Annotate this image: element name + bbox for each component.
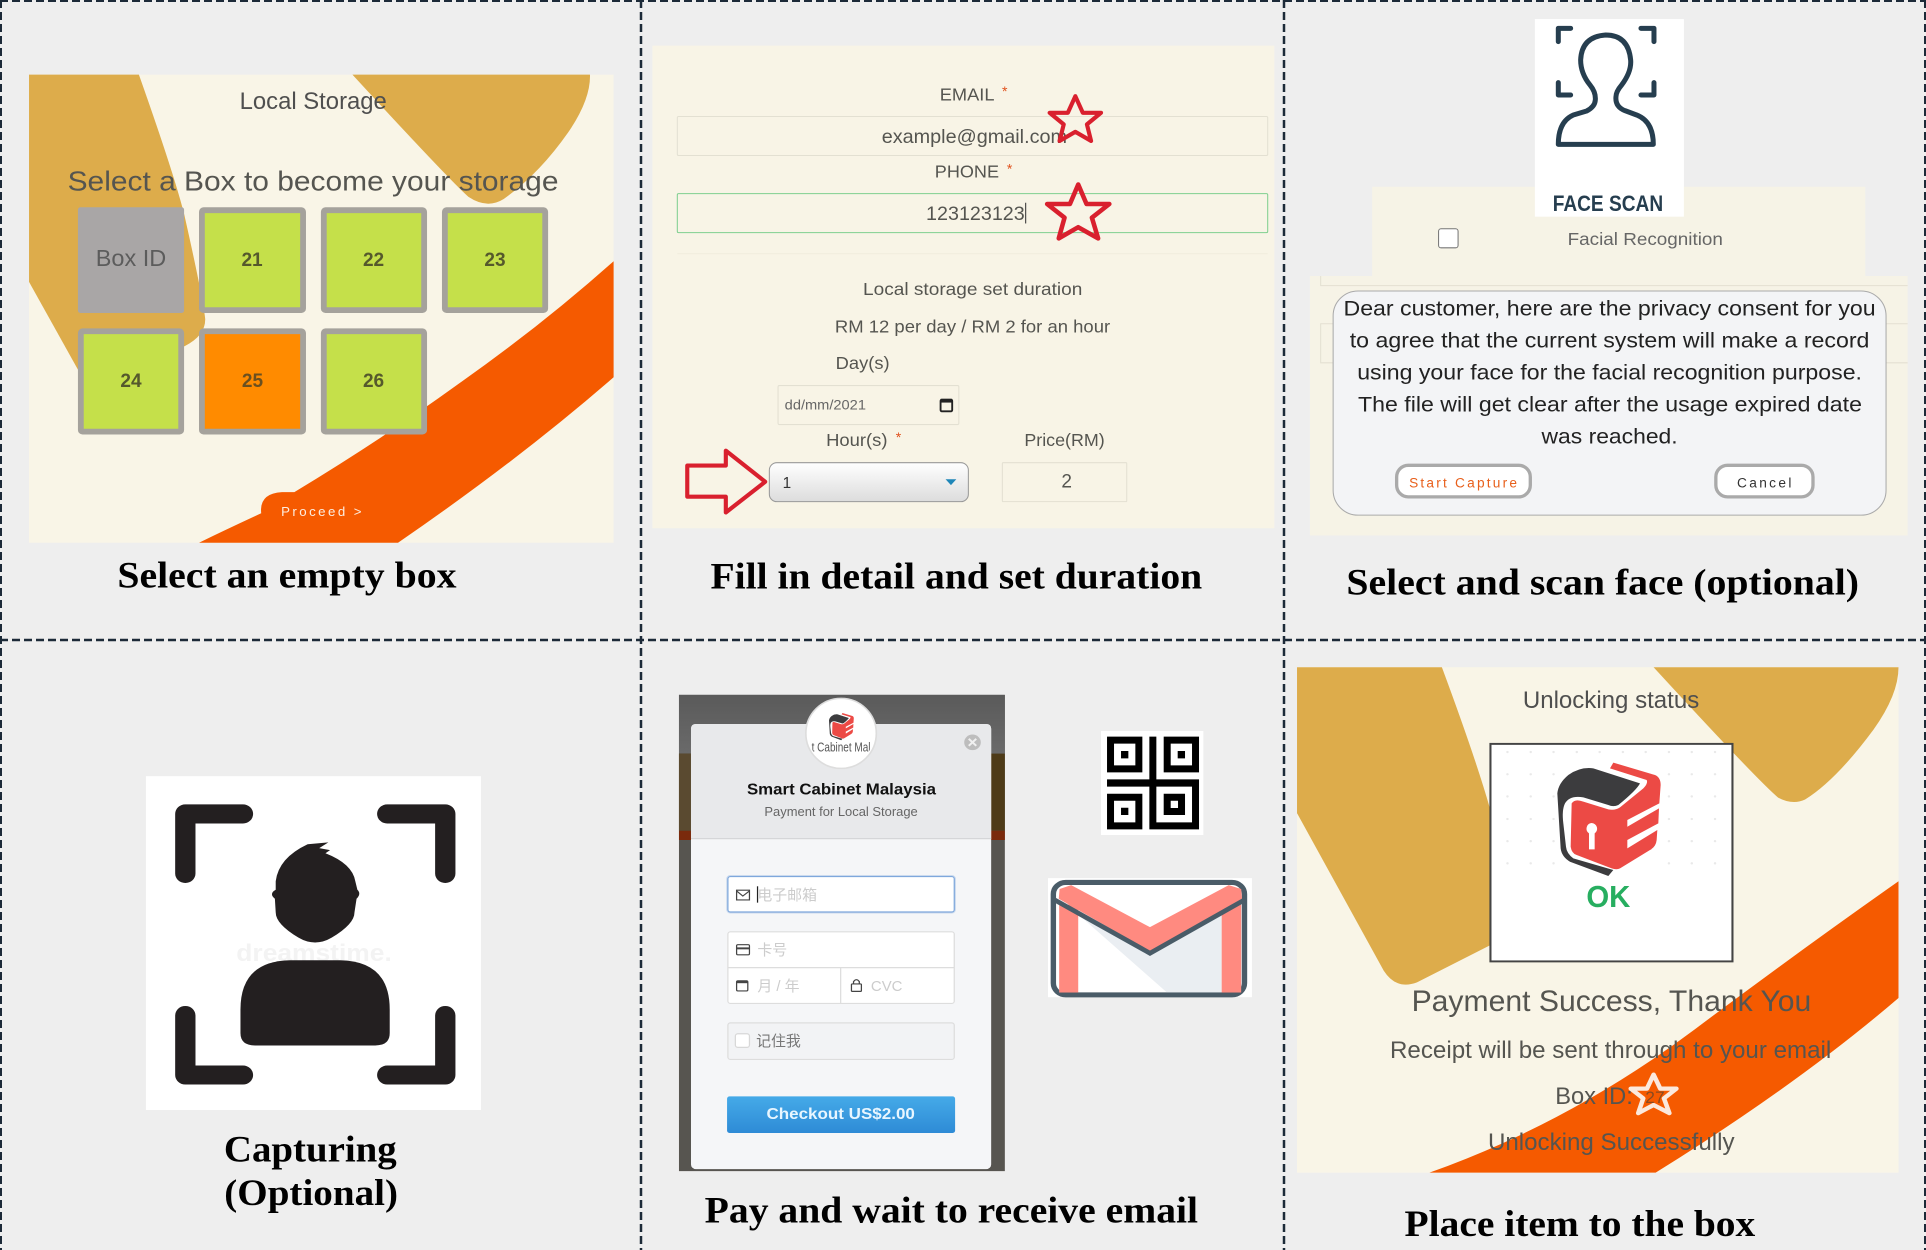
box 23: 23 <box>484 250 506 271</box>
small logo <box>829 713 854 740</box>
icon: gmail envelope <box>1048 878 1252 997</box>
box 21: 21 <box>241 250 263 271</box>
box id text: Box ID: <box>1555 1084 1633 1110</box>
screenshot background <box>29 75 614 543</box>
card fields <box>728 932 954 1003</box>
heading: Place item: Place item to the box <box>1405 1204 1755 1245</box>
orange swoosh <box>199 261 614 543</box>
instruction text: Select a Box to become your storage <box>68 165 558 197</box>
box 24 <box>81 331 181 432</box>
head <box>272 842 359 943</box>
clipped logo text: t Cabinet Mal <box>812 740 871 755</box>
phone label: * <box>1007 161 1013 177</box>
box 21 <box>202 210 303 310</box>
card fields: 卡号 <box>757 943 787 959</box>
payment modal <box>691 698 991 1169</box>
consent text: to agree that the current system will make a record <box>1350 327 1869 352</box>
form background <box>652 46 1274 528</box>
icon: QR code <box>1101 731 1203 835</box>
checkbox <box>1439 229 1458 248</box>
gold shape left <box>1297 667 1490 985</box>
box 23 <box>445 210 545 310</box>
card fields: CVC <box>871 978 902 995</box>
date input <box>778 386 959 425</box>
box 22 <box>324 210 424 310</box>
start capture button: Start Capture <box>1409 475 1517 490</box>
box 22: 22 <box>363 250 384 271</box>
gold shape left <box>29 75 205 371</box>
remember me: 记住我 <box>756 1033 801 1050</box>
title: Local Storage: Local Storage <box>240 89 387 115</box>
logo circle <box>806 698 876 768</box>
days label: Day(s) <box>836 353 890 373</box>
capture icon <box>146 776 481 1110</box>
cancel button <box>1716 465 1813 497</box>
logo card <box>1490 744 1732 961</box>
unlocking status title: Unlocking status <box>1523 688 1699 714</box>
checkout button <box>727 1096 955 1133</box>
white star over box id: 27 <box>1645 1089 1665 1107</box>
hours select: 1 <box>783 475 791 492</box>
price label: Price(RM) <box>1024 430 1105 450</box>
consent text: using your face for the facial recognition purpose. <box>1357 359 1862 384</box>
corner brackets <box>185 814 445 1075</box>
consent text: The file will get clear after the usage expired date <box>1358 391 1862 416</box>
panel: pay and wait for email <box>679 695 1252 1231</box>
box 25: 25 <box>242 371 263 392</box>
consent text <box>1344 295 1876 448</box>
duration title: Local storage set duration <box>863 279 1082 299</box>
heading: Fill in detail: Fill in detail and set duration <box>710 556 1202 597</box>
merchant name: Smart Cabinet Malaysia <box>747 781 937 798</box>
close icon <box>964 735 981 750</box>
hours select <box>769 463 968 502</box>
consent dialog <box>1333 291 1886 515</box>
red arrow <box>687 451 765 512</box>
hours label: * <box>896 429 902 445</box>
price box <box>1002 463 1127 502</box>
orange swoosh <box>1429 881 1898 1173</box>
date input: dd/mm/2021 <box>785 398 866 413</box>
hours label: Hour(s) <box>826 430 888 450</box>
facial recognition label: Facial Recognition <box>1568 229 1723 249</box>
start capture button <box>1397 465 1530 497</box>
heading: Pay and wait: Pay and wait to receive email <box>705 1191 1198 1231</box>
OK label: OK <box>1586 879 1630 914</box>
phone input <box>677 194 1268 233</box>
icon: face outline <box>1558 28 1654 144</box>
panel: select an empty box <box>29 75 614 595</box>
heading: Capturing (Optional): Capturing <box>224 1129 397 1170</box>
email label: EMAIL <box>940 84 995 104</box>
unlocking successfully text: Unlocking Successfully <box>1488 1130 1735 1156</box>
panel: select and scan face <box>1310 19 1908 602</box>
card fields: 月 / 年 <box>757 978 800 995</box>
red star: phone <box>1047 184 1109 238</box>
phone input: 123123123 <box>926 204 1025 225</box>
upper form background <box>1372 187 1865 276</box>
email field: 电子邮箱 <box>757 887 817 904</box>
red star: email <box>1050 96 1101 141</box>
pricing text: RM 12 per day / RM 2 for an hour <box>835 317 1110 337</box>
email input: example@gmail.com <box>882 127 1067 148</box>
email field <box>728 877 954 912</box>
body <box>240 960 390 1045</box>
heading: Capturing (Optional) <box>224 1129 398 1214</box>
icon: smart cabinet logo <box>1557 763 1661 876</box>
box 26 <box>324 331 424 432</box>
phone label: PHONE <box>935 161 999 181</box>
lower form background <box>1310 276 1908 535</box>
screenshot background <box>1297 667 1898 1173</box>
checkout button: Checkout US$2.00 <box>766 1105 915 1123</box>
box 24: 24 <box>120 371 142 392</box>
remember me <box>728 1023 954 1059</box>
cancel button: Cancel <box>1737 475 1791 490</box>
heading: Capturing (Optional): (Optional) <box>224 1173 398 1214</box>
email input <box>677 117 1268 155</box>
heading: Select an empty box: Select an empty box <box>117 554 457 595</box>
box 26: 26 <box>363 371 384 392</box>
proceed button label: Proceed > <box>281 504 362 519</box>
heading: Select and scan face: Select and scan face (optional) <box>1346 561 1859 602</box>
receipt text: Receipt will be sent through to your email <box>1390 1038 1831 1064</box>
face scan card <box>1535 19 1684 217</box>
email label: * <box>1002 83 1008 99</box>
price box: 2 <box>1061 472 1072 493</box>
box: Box ID <box>78 207 184 313</box>
box 25 <box>202 331 303 432</box>
box: Box ID: Box ID <box>96 245 166 271</box>
face scan label: FACE SCAN <box>1553 191 1663 216</box>
white star over box id <box>1631 1075 1676 1113</box>
payment success text: Payment Success, Thank You <box>1412 986 1811 1018</box>
panel: capturing <box>146 776 481 1214</box>
dot pattern <box>1506 751 1716 865</box>
panel: place item to the box <box>1297 667 1898 1245</box>
panel: fill in detail and set duration <box>652 46 1274 597</box>
dimmed page behind modal <box>679 695 1005 1171</box>
gold shape right <box>1654 667 1898 802</box>
gold shape right <box>352 75 590 204</box>
consent text: was reached. <box>1540 423 1678 448</box>
watermark: dreamstime. <box>236 940 392 967</box>
consent text: Dear customer, here are the privacy consent for you <box>1344 295 1876 320</box>
merchant subtitle: Payment for Local Storage <box>764 804 918 819</box>
